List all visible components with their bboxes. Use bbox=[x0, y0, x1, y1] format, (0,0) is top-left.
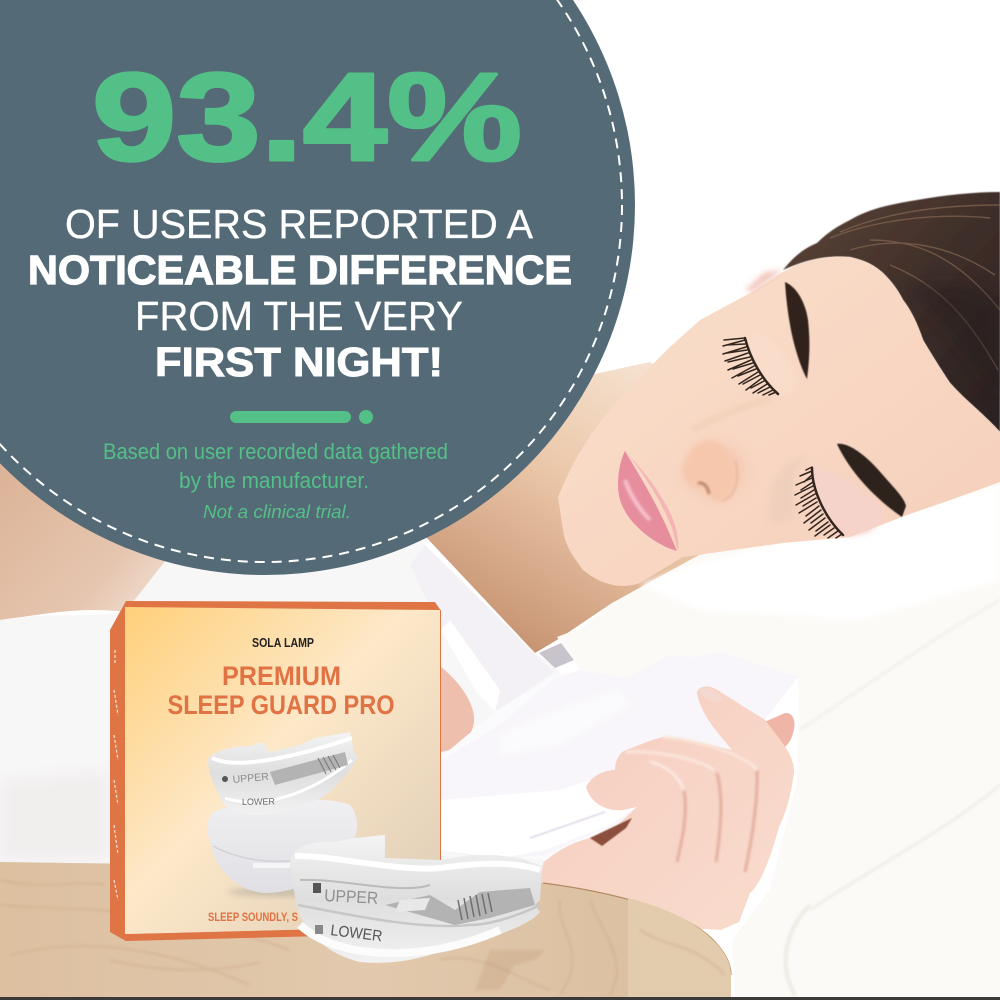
shoulder and neck skin bbox=[410, 362, 720, 653]
sheet sleeve bbox=[441, 652, 799, 860]
headline stat: 93.4% bbox=[92, 48, 522, 187]
disclaimer: Not a clinical trial. bbox=[203, 502, 351, 522]
guard case bbox=[207, 800, 357, 897]
shirt sleeve bbox=[441, 675, 650, 860]
box title: PREMIUM bbox=[222, 661, 341, 691]
statement line 4: FIRST NIGHT! bbox=[155, 339, 443, 385]
eyebrow 1 bbox=[785, 282, 809, 379]
statistic circle bbox=[0, 0, 635, 575]
dashed stitching bbox=[0, 0, 622, 562]
statistic circle: by the manufacturer. bbox=[179, 468, 369, 493]
small guard on box: LOWER bbox=[242, 796, 276, 807]
hand bbox=[540, 686, 794, 930]
dark baseline bbox=[0, 997, 1000, 1000]
product box: SLEEP GUARD PRO bbox=[168, 690, 394, 720]
divider dot bbox=[359, 410, 373, 424]
eyelids bbox=[745, 333, 797, 395]
face bbox=[558, 257, 1000, 586]
hand shadow gap bbox=[590, 818, 632, 846]
small guard on box bbox=[208, 732, 358, 815]
pillow bbox=[557, 475, 1000, 1000]
wooden table bbox=[0, 862, 731, 997]
sheet held in hand bbox=[441, 760, 650, 858]
large mouthguard bbox=[290, 835, 542, 963]
nose bbox=[683, 440, 736, 501]
box spine bbox=[110, 601, 126, 941]
box front bbox=[125, 607, 440, 934]
eyelashes 1 bbox=[723, 338, 778, 395]
label LOWER: LOWER bbox=[330, 922, 383, 945]
spine print bbox=[114, 650, 118, 900]
eyebrow 2 bbox=[837, 444, 906, 517]
elbow skin bbox=[441, 667, 474, 752]
palm and fingers bbox=[540, 686, 794, 930]
box top edge bbox=[126, 601, 441, 611]
product box bbox=[110, 601, 441, 941]
label UPPER: UPPER bbox=[324, 886, 379, 908]
footnote: Based on user recorded data gathered bbox=[103, 439, 448, 464]
left forearm skin bbox=[0, 420, 170, 620]
lips bbox=[618, 451, 677, 551]
hair bbox=[783, 192, 1000, 432]
small guard on box: UPPER bbox=[232, 771, 270, 786]
shirt bbox=[0, 530, 640, 880]
box bottom edge bbox=[125, 926, 441, 941]
brand: SOLA LAMP bbox=[252, 636, 314, 650]
face shading bbox=[692, 398, 770, 430]
box tagline: SLEEP SOUNDLY, S bbox=[208, 912, 298, 924]
eyelashes 2 bbox=[795, 467, 843, 538]
statement line 2: NOTICEABLE DIFFERENCE bbox=[28, 247, 572, 293]
statement line 1: OF USERS REPORTED A bbox=[65, 201, 534, 247]
fingernail bbox=[700, 688, 724, 702]
shirt collar folds bbox=[410, 545, 554, 712]
back finger bbox=[760, 713, 794, 750]
circle background bbox=[0, 0, 635, 575]
finger creases bbox=[677, 770, 757, 872]
divider bar bbox=[230, 411, 351, 423]
statement line 3: FROM THE VERY bbox=[135, 293, 463, 339]
